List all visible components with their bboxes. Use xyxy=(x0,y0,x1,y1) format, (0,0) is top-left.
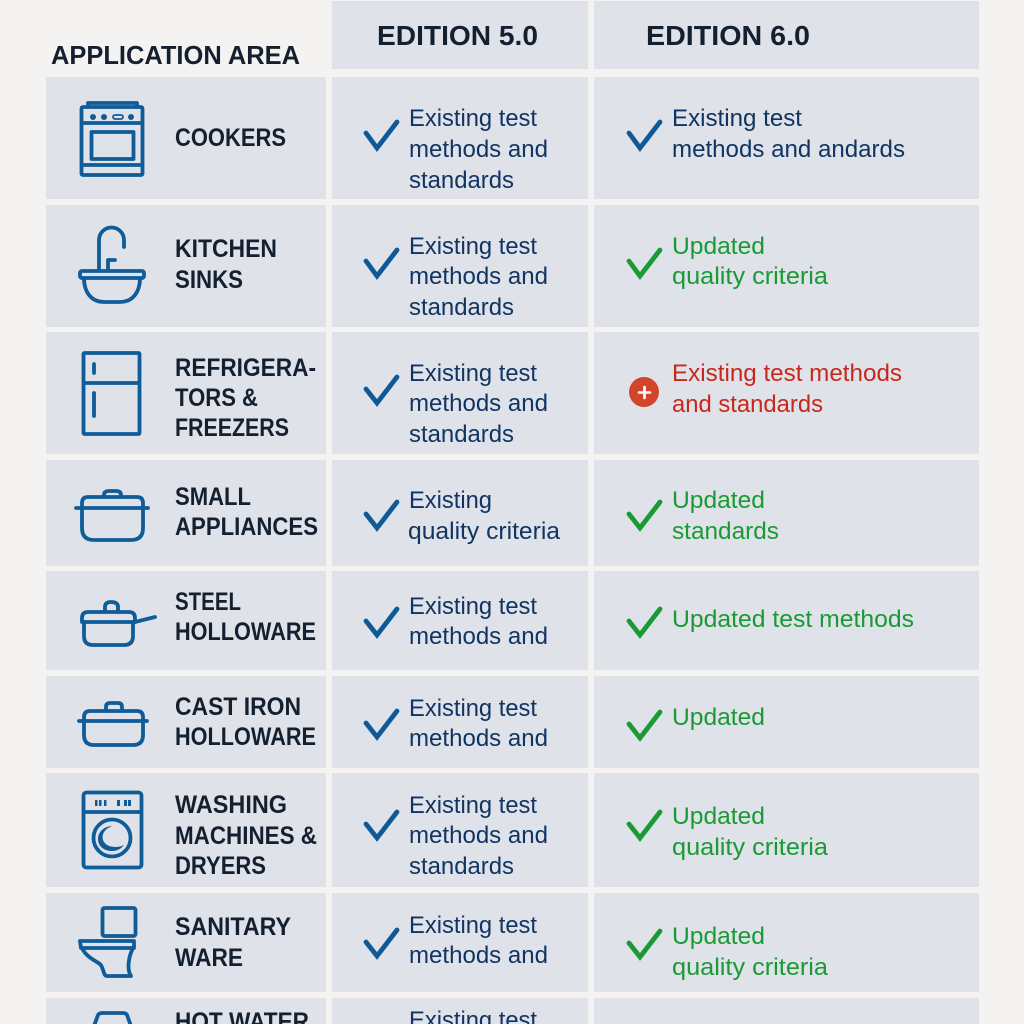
edition 6.0 status xyxy=(629,105,905,163)
edition 5.0 status: Existing xyxy=(409,487,492,514)
edition 5.0 status: methods and xyxy=(409,623,548,650)
label: washing machines and dryers: WASHING xyxy=(175,791,287,819)
label: steel holloware: STEEL xyxy=(175,588,241,616)
edition 6.0 status xyxy=(629,923,829,981)
icon: cooker xyxy=(82,103,142,175)
edition 5.0 status xyxy=(366,360,548,448)
edition 5.0 status xyxy=(366,593,548,650)
heading: edition 6.0: EDITION 6.0 xyxy=(646,20,810,51)
label: washing machines and dryers xyxy=(175,791,317,880)
icon: kitchen sink xyxy=(80,227,144,302)
label: refrigerators and freezers: FREEZERS xyxy=(175,414,289,442)
row: steel holloware xyxy=(46,571,979,670)
label: cast iron holloware: HOLLOWARE xyxy=(175,723,316,751)
edition 6.0 status: Updated xyxy=(672,233,765,260)
label: refrigerators and freezers xyxy=(175,354,316,442)
edition 5.0 status: methods and xyxy=(409,263,548,290)
edition 6.0 status: standards xyxy=(672,518,779,545)
edition 5.0 status xyxy=(366,695,548,752)
edition 6.0 status xyxy=(629,487,779,545)
icon: casserole xyxy=(79,703,147,745)
edition 5.0 status xyxy=(366,487,561,545)
edition 5.0 status: Existing test xyxy=(409,105,537,132)
label: sanitary ware: SANITARY xyxy=(175,913,291,941)
edition 6.0 status: quality criteria xyxy=(672,263,829,290)
edition 6.0 status: Updated test methods xyxy=(672,606,914,633)
edition 5.0 status: Existing test xyxy=(409,233,537,260)
label: steel holloware: HOLLOWARE xyxy=(175,618,316,646)
edition 5.0 status: standards xyxy=(409,421,514,448)
label: cookers: COOKERS xyxy=(175,124,286,152)
edition 5.0 status xyxy=(366,233,548,321)
edition 6.0 status xyxy=(629,704,765,738)
edition 5.0 status: methods and xyxy=(409,942,548,969)
header row xyxy=(51,1,979,70)
row: small appliances xyxy=(46,460,979,566)
edition 6.0 status xyxy=(629,803,829,861)
icon: hot water heater xyxy=(94,1013,131,1024)
edition 5.0 status: standards xyxy=(409,853,514,880)
label: kitchen sinks xyxy=(175,235,277,294)
label: washing machines and dryers: DRYERS xyxy=(175,852,266,880)
row: cast iron holloware xyxy=(46,676,979,768)
edition 5.0 status: methods and xyxy=(409,822,548,849)
label: small appliances: SMALL xyxy=(175,483,251,511)
row: cookers xyxy=(46,77,979,199)
label: steel holloware xyxy=(175,588,316,646)
edition 6.0 status: quality criteria xyxy=(672,834,829,861)
icon: pot xyxy=(76,491,148,540)
edition 6.0 status xyxy=(629,233,829,290)
edition 5.0 status: methods and xyxy=(409,725,548,752)
edition 6.0 status: methods and andards xyxy=(672,136,905,163)
row: kitchen sinks xyxy=(46,205,979,327)
label: sanitary ware xyxy=(175,913,291,972)
edition 6.0 status xyxy=(629,360,902,418)
edition 6.0 status: Updated xyxy=(672,923,765,950)
icon: refrigerator xyxy=(84,353,140,434)
row: hot water xyxy=(46,998,979,1024)
label: small appliances: APPLIANCES xyxy=(175,513,318,541)
edition 6.0 status: Existing test methods xyxy=(672,360,902,387)
edition 6.0 status: Updated xyxy=(672,487,765,514)
label: kitchen sinks: SINKS xyxy=(175,266,243,294)
label: cast iron holloware xyxy=(175,693,316,751)
heading: edition 6.0 xyxy=(594,1,979,69)
row: refrigerators and freezers xyxy=(46,332,979,454)
edition 5.0 status: Existing test xyxy=(409,695,537,722)
label: cast iron holloware: CAST IRON xyxy=(175,693,301,721)
label: small appliances xyxy=(175,483,318,541)
icon: toilet xyxy=(80,908,136,976)
edition 6.0 status: quality criteria xyxy=(672,954,829,981)
edition 5.0 status: Existing test xyxy=(409,912,537,939)
edition 5.0 status xyxy=(366,105,548,194)
edition 5.0 status: Existing test xyxy=(409,593,537,620)
heading: application area: APPLICATION AREA xyxy=(51,40,300,70)
edition 5.0 status: quality criteria xyxy=(408,518,561,545)
label: sanitary ware: WARE xyxy=(175,944,243,972)
row: sanitary ware xyxy=(46,893,979,992)
edition 5.0 status: methods and xyxy=(409,136,548,163)
edition 6.0 status: Updated xyxy=(672,803,765,830)
heading: edition 5.0: EDITION 5.0 xyxy=(377,20,538,51)
edition 6.0 status: Updated xyxy=(672,704,765,731)
edition 6.0 status: and standards xyxy=(672,391,823,418)
edition 5.0 status: methods and xyxy=(409,390,548,417)
edition 5.0 status: standards xyxy=(409,167,514,194)
label: refrigerators and freezers: TORS & xyxy=(175,384,258,412)
edition 5.0 status: Existing test xyxy=(409,792,537,819)
edition 5.0 status xyxy=(366,792,548,880)
label: kitchen sinks: KITCHEN xyxy=(175,235,277,263)
edition 5.0 status: Existing test xyxy=(409,360,537,387)
icon: washing machine xyxy=(84,792,142,868)
heading: edition 5.0 xyxy=(332,1,588,69)
icon: saucepan xyxy=(82,602,155,645)
edition 5.0 status: standards xyxy=(409,294,514,321)
edition 5.0 status xyxy=(366,912,548,969)
label: refrigerators and freezers: REFRIGERA- xyxy=(175,354,316,382)
row: washing machines and dryers xyxy=(46,773,979,887)
edition 6.0 status: Existing test xyxy=(672,105,802,132)
label: washing machines and dryers: MACHINES & xyxy=(175,822,317,850)
